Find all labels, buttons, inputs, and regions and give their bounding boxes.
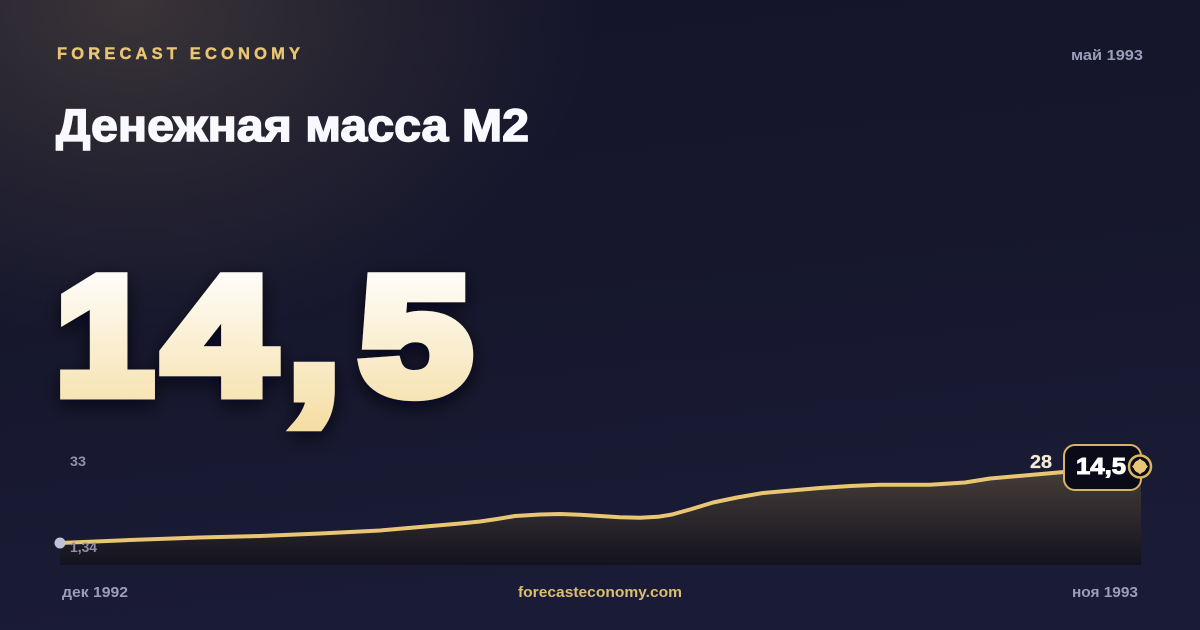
big number (56, 229, 471, 436)
end point marker (1129, 456, 1151, 478)
big number: 5 (360, 244, 471, 429)
peak label: 28 (1030, 452, 1052, 472)
area chart (60, 467, 1141, 565)
brand label: FORECAST ECONOMY (57, 45, 300, 63)
big number: 1 (56, 244, 153, 429)
title: Денежная масса M2 (56, 100, 529, 151)
big number: , (287, 229, 341, 436)
big number: 4 (164, 244, 274, 429)
x axis end label: ноя 1993 (1072, 584, 1138, 601)
axis min label: 1,34 (70, 539, 97, 555)
axis max label: 33 (70, 453, 86, 469)
chart area fill (60, 467, 1141, 565)
date label: top right: май 1993 (1071, 47, 1143, 64)
current value callout (1064, 445, 1141, 490)
x axis start label: дек 1992 (62, 584, 128, 601)
chart line (60, 467, 1141, 543)
current value callout: 14,5 (1076, 453, 1126, 479)
start point marker (54, 538, 66, 548)
website label: forecasteconomy.com (518, 584, 682, 601)
